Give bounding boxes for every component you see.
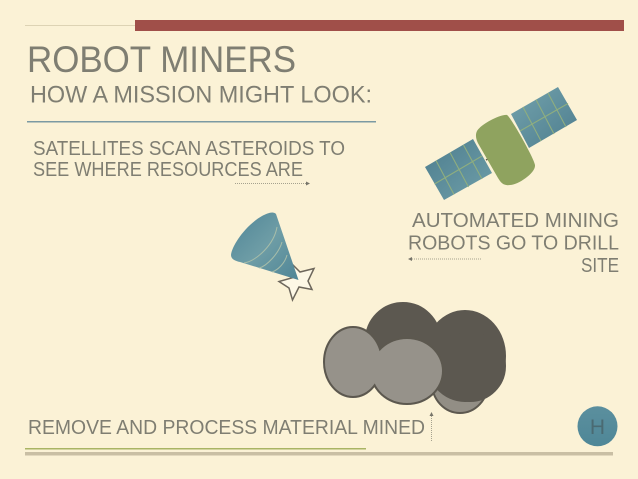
arrow: upward	[430, 412, 434, 441]
text: satellites scan: SEE WHERE RESOURCES ARE	[33, 159, 303, 181]
text: automated mining	[408, 210, 619, 277]
icon: satellite	[425, 87, 577, 200]
text: satellites scan: SATELLITES SCAN ASTEROIDS TO	[33, 138, 345, 160]
icon: scanning cone and star	[231, 213, 314, 300]
text: automated mining: AUTOMATED MINING	[412, 210, 619, 232]
satellite connectors	[486, 131, 514, 160]
cone	[231, 213, 298, 280]
star	[279, 264, 314, 300]
cone rings	[244, 227, 287, 272]
text: remove and process: REMOVE AND PROCESS MATERIAL MINED	[28, 417, 425, 439]
satellite body	[476, 115, 535, 185]
subtitle: HOW A MISSION MIGHT LOOK:	[30, 82, 372, 108]
top accent bar	[25, 20, 624, 31]
dark rocks	[366, 303, 505, 401]
icon: H badge: H	[590, 416, 605, 439]
back grey rock	[432, 353, 488, 413]
text: satellites scan	[33, 138, 345, 181]
front grey rocks	[324, 327, 443, 404]
text: automated mining: ROBOTS GO TO DRILL	[408, 232, 619, 254]
left solar panel	[425, 139, 492, 200]
title: ROBOT MINERS	[27, 38, 296, 80]
icon: H badge	[578, 406, 618, 446]
arrow: to asteroid	[408, 257, 482, 261]
text: automated mining: SITE	[581, 255, 619, 277]
subtitle rule	[27, 121, 376, 122]
icon: asteroid cloud	[324, 303, 505, 413]
right solar panel	[511, 87, 577, 148]
arrow: to satellite	[235, 182, 310, 186]
bottom rules	[25, 448, 613, 456]
